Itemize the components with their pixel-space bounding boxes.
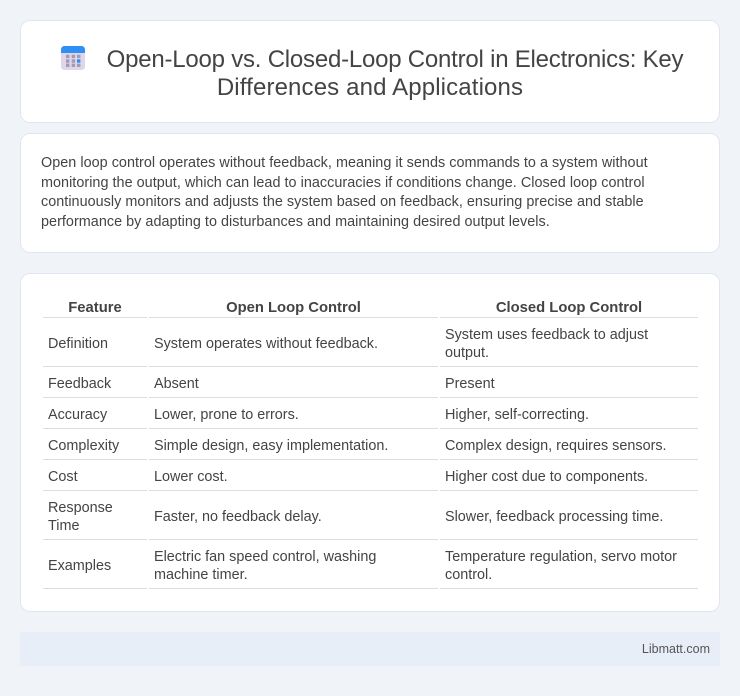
comparison table panel: Simple design, easy implementation. <box>154 438 388 454</box>
comparison table panel: Faster, no feedback delay. <box>154 509 322 525</box>
row: Response Time <box>48 500 113 534</box>
row: Complexity: Complexity <box>48 438 119 454</box>
row: Examples: Examples <box>48 558 111 574</box>
footer bar <box>20 632 720 666</box>
footer text: Libmatt.com <box>642 642 710 656</box>
row: Feedback: Feedback <box>48 376 111 392</box>
intro panel <box>20 133 720 253</box>
comparison table panel: machine timer. <box>154 567 248 583</box>
comparison table panel: Temperature regulation, servo motor <box>445 549 677 565</box>
icon: calendar <box>61 46 85 70</box>
comparison table panel: Lower cost. <box>154 469 228 485</box>
row: Response Time: Response <box>48 500 113 516</box>
comparison table panel: System uses feedback to adjust <box>445 327 648 343</box>
row: Response Time: Time <box>48 518 79 534</box>
comparison table panel: output. <box>445 345 489 361</box>
intro text: performance by adapting to disturbances and maintaining desired output levels. <box>41 214 550 230</box>
comparison table panel: Higher, self-correcting. <box>445 407 589 423</box>
comparison table panel: Electric fan speed control, washing <box>154 549 376 565</box>
intro text: Open loop control operates without feedback, meaning it sends commands to a system without <box>41 155 648 171</box>
intro text <box>41 155 648 230</box>
intro text: monitoring the output, which can lead to inaccuracies if conditions change. Closed loop control <box>41 175 645 191</box>
comparison table panel <box>20 273 720 612</box>
title: Open-Loop vs. Closed-Loop Control in Electronics: Key <box>107 46 683 73</box>
comparison table panel: Lower, prone to errors. <box>154 407 299 423</box>
title <box>107 46 684 101</box>
comparison table panel: Slower, feedback processing time. <box>445 509 663 525</box>
comparison table panel: Present <box>445 376 495 392</box>
table header: Open Loop Control: Open Loop Control <box>226 300 361 316</box>
comparison table panel: System operates without feedback. <box>154 336 378 352</box>
table header: Feature: Feature <box>68 300 122 316</box>
table header: Closed Loop Control: Closed Loop Control <box>496 300 642 316</box>
header panel <box>20 20 720 123</box>
comparison table panel: Absent <box>154 376 199 392</box>
row: Definition: Definition <box>48 336 108 352</box>
row: Cost: Cost <box>48 469 78 485</box>
comparison table panel: Higher cost due to components. <box>445 469 648 485</box>
title: Differences and Applications <box>217 74 523 101</box>
intro text: continuously monitors and adjusts the system based on feedback, ensuring precise and stable <box>41 194 644 210</box>
comparison table panel: control. <box>445 567 492 583</box>
row: Accuracy: Accuracy <box>48 407 107 423</box>
comparison table panel: Complex design, requires sensors. <box>445 438 667 454</box>
